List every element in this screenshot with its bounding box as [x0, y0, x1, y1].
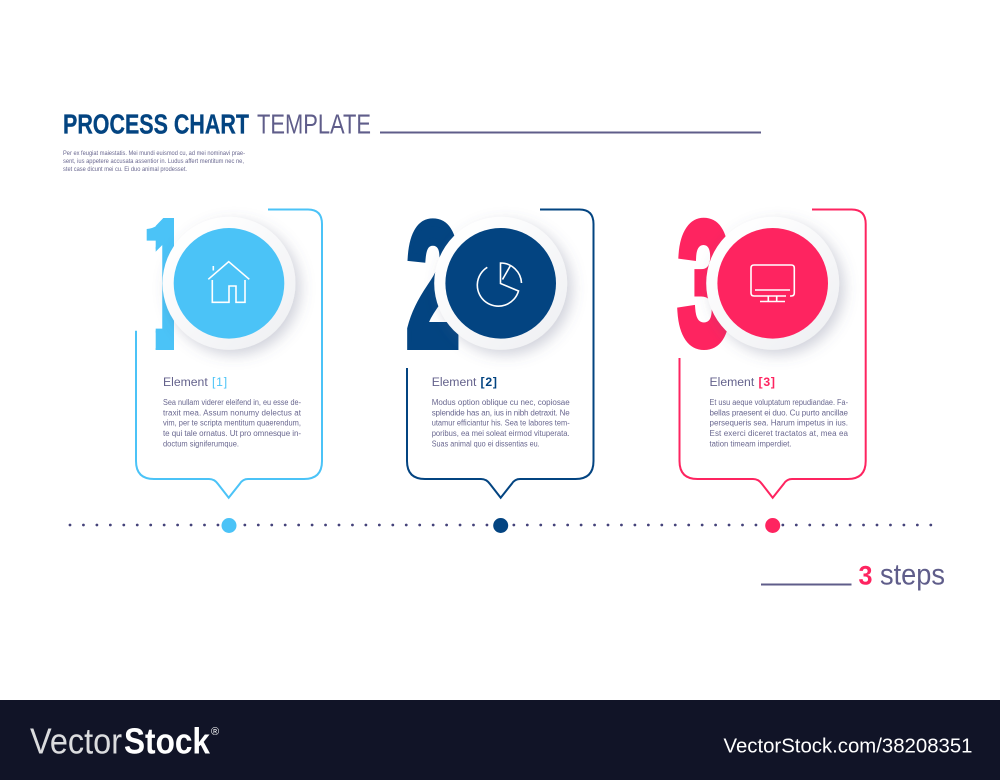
circle 1: [174, 228, 284, 339]
numeral 2: 2: [406, 187, 460, 384]
panel: step 1: [136, 179, 322, 498]
body text 1: doctum signiferumque.: [163, 439, 239, 448]
steps caption: 3: [858, 560, 872, 590]
numeral 1: [146, 218, 174, 350]
footer logo: [30, 720, 211, 762]
heading 3: [3]: [758, 375, 776, 389]
ring 2: [434, 217, 567, 350]
body text 3: persequeris sea. Harum impetus in ius.: [710, 419, 848, 428]
card outline 3: [680, 210, 866, 498]
body text 1: te qui tale ornatus. Ut pro omnesque in-: [163, 429, 301, 438]
footer bar: [0, 700, 1000, 780]
heading 2: Element: [432, 375, 476, 389]
timeline marker 2: [493, 518, 508, 533]
footer logo: Stock: [124, 720, 211, 762]
ring 1: [162, 217, 296, 350]
body text 3: bellas praesent ei duo. Cu purto ancillae: [710, 408, 849, 417]
timeline marker 3: [765, 518, 780, 533]
body text 2: poribus, ea mei soleat eirmod vituperata.: [432, 429, 570, 438]
body text 2: Suas animal quo ei dissentias eu.: [432, 439, 540, 448]
body text 3: [710, 398, 849, 448]
body text 1: Sea nullam viderer eleifend in, eu esse de-: [163, 398, 301, 407]
body text 3: Est exerci diceret tractatos at, mea ea: [710, 429, 849, 438]
card outline 2: [407, 210, 594, 498]
timeline marker 1: [222, 518, 236, 533]
body text 2: splendide has an, ius in nibh detraxit. Ne: [432, 408, 570, 417]
icon: monitor: [751, 265, 794, 302]
icon: pie chart: [477, 263, 522, 306]
title: PROCESS CHART: [63, 108, 249, 140]
ring 3: [706, 217, 839, 350]
footer id: VectorStock.com/38208351: [724, 736, 972, 758]
body text 1: vim, per te scripta mentitum quaerendum,: [163, 419, 301, 428]
body text 3: tation timeam imperdiet.: [710, 439, 792, 448]
intro text block: sent, ius appetere accusata assentior in. Ludus affert mentitum nec ne,: [63, 159, 244, 165]
intro text block: stet case dicunt mei cu. Ei duo animal prodesset.: [63, 167, 187, 173]
title: [63, 108, 761, 140]
body text 2: utamur efficiantur his. Sea te labores tem-: [432, 419, 570, 428]
icon: house: [208, 262, 249, 302]
intro text block: [63, 151, 245, 173]
heading 3: Element: [710, 375, 754, 389]
heading 1: [1]: [212, 375, 228, 389]
circle 3: [717, 228, 828, 339]
title: TEMPLATE: [257, 108, 371, 140]
panel: step 2: [406, 187, 594, 498]
registered mark: ®: [211, 726, 219, 738]
body text 2: Modus option oblique cu nec, copiosae: [432, 398, 570, 407]
card outline 1: [136, 210, 322, 498]
body text 1: [163, 398, 302, 448]
footer logo: Vector: [30, 720, 122, 762]
heading 1: Element: [163, 375, 208, 389]
dotted timeline: [70, 518, 931, 533]
body text 1: traxit mea. Assum nonumy delectus at: [163, 408, 302, 417]
heading 2: [2]: [480, 375, 498, 389]
panel: step 3: [677, 185, 866, 498]
body text 3: Et usu aeque voluptatum repudiandae. Fa-: [710, 398, 848, 407]
numeral 1: 1: [136, 179, 202, 391]
steps caption: [761, 558, 945, 592]
body text 2: [432, 398, 570, 448]
steps caption: steps: [880, 558, 945, 592]
circle 2: [445, 228, 556, 339]
intro text block: Per ex feugiat maiestatis. Mei mundi euismod cu, ad mei nominavi prae-: [63, 151, 245, 157]
numeral 3: 3: [677, 185, 731, 381]
